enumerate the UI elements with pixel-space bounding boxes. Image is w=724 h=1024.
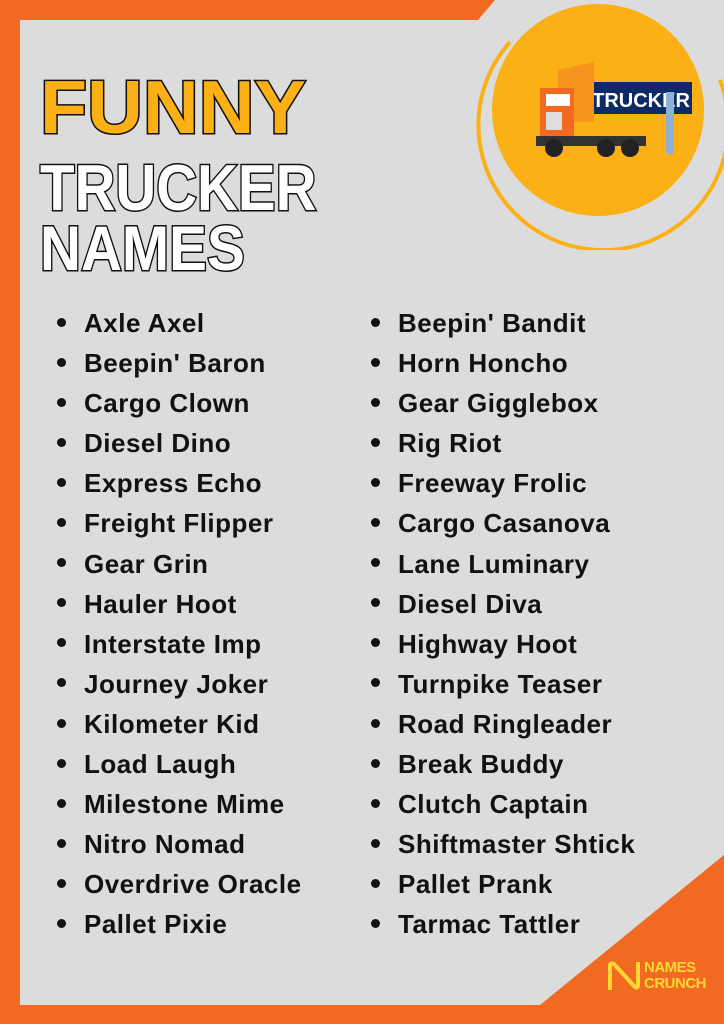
list: column 1: Journey Joker (84, 669, 268, 699)
list: column 1: Diesel Dino (84, 428, 231, 458)
list: column 1 (57, 308, 302, 939)
list: column 1: Nitro Nomad (84, 829, 246, 859)
list: column 1: Load Laugh (84, 749, 236, 779)
logo: names crunch (608, 959, 706, 992)
list: column 1: Interstate Imp (84, 629, 262, 659)
list: column 1: Cargo Clown (84, 388, 250, 418)
list: column 2: Shiftmaster Shtick (398, 829, 635, 859)
list: column 1: Beepin' Baron (84, 348, 266, 378)
list: column 2: Tarmac Tattler (398, 909, 580, 939)
list: column 1: Express Echo (84, 468, 262, 498)
list: column 1: Gear Grin (84, 549, 208, 579)
list: column 2: Turnpike Teaser (398, 669, 602, 699)
icon: truck logo circle (476, 4, 724, 250)
list: column 1: Kilometer Kid (84, 709, 260, 739)
list: column 1: Overdrive Oracle (84, 869, 302, 899)
list: column 2: Cargo Casanova (398, 508, 610, 538)
logo: names crunch: NAMES (644, 959, 696, 976)
list: column 1: Axle Axel (84, 308, 205, 338)
icon: truck logo circle: TRUCKER (592, 90, 690, 112)
list: column 1: Freight Flipper (84, 508, 274, 538)
list: column 1: Hauler Hoot (84, 589, 237, 619)
list: column 2: Highway Hoot (398, 629, 577, 659)
list: column 2: Horn Honcho (398, 348, 568, 378)
title: names: NAMES (40, 214, 245, 284)
list: column 2: Diesel Diva (398, 589, 542, 619)
list: column 2: Pallet Prank (398, 869, 553, 899)
list: column 1: Milestone Mime (84, 789, 285, 819)
list: column 2: Gear Gigglebox (398, 388, 599, 418)
title: trucker: TRUCKER (40, 151, 316, 224)
logo: names crunch: CRUNCH (644, 975, 706, 992)
list: column 2: Beepin' Bandit (398, 308, 586, 338)
list: column 2 (371, 308, 635, 939)
list: column 2: Freeway Frolic (398, 468, 587, 498)
list: column 2: Clutch Captain (398, 789, 588, 819)
list: column 2: Break Buddy (398, 749, 564, 779)
list: column 2: Rig Riot (398, 428, 502, 458)
list: column 2: Lane Luminary (398, 549, 589, 579)
title: funny: FUNNY (40, 65, 306, 149)
list: column 2: Road Ringleader (398, 709, 612, 739)
title (39, 65, 318, 284)
list: column 1: Pallet Pixie (84, 909, 227, 939)
